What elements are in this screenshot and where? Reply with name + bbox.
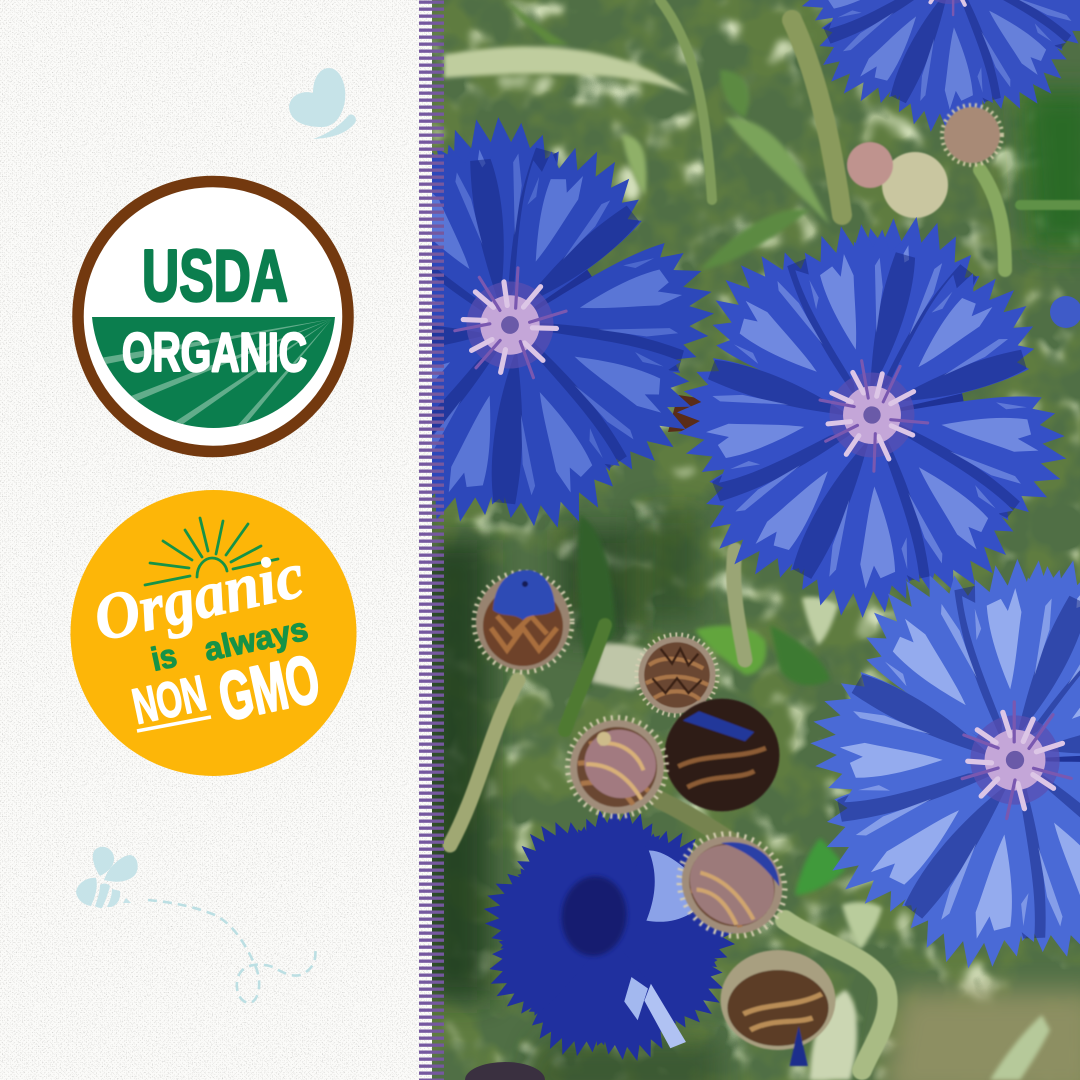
flower: dark lower: [484, 810, 735, 1061]
bud: small round: [638, 636, 716, 714]
bud: dark: [664, 699, 780, 811]
bud: purple-brown: [676, 830, 788, 940]
flower: center: [677, 217, 1066, 618]
flower heads: top small buds: [847, 105, 1002, 218]
badge: Organic is always Non GMO: Organic: [87, 538, 310, 656]
badge: USDA Organic seal: [78, 182, 348, 452]
badge: Organic is always Non GMO: is: [148, 636, 180, 678]
background: fabric panel: [0, 0, 432, 1080]
icon: sun rays: [145, 518, 278, 585]
bud: bottom edge: [465, 1062, 545, 1080]
photo background foliage: [420, 0, 1080, 1080]
leaves: [444, 0, 1050, 1080]
bud: blue tipped: [475, 570, 571, 671]
badge: Organic is always Non GMO: always: [201, 610, 311, 668]
bud: right edge: [1050, 296, 1080, 328]
bud: lower brown: [720, 950, 836, 1066]
badge: Organic is always Non GMO: [70, 490, 356, 776]
bud: pink: [564, 714, 670, 820]
badge: Organic is always Non GMO: NON: [128, 665, 211, 735]
photo: cornflowers: [432, 0, 1080, 1080]
flower: lower right: [810, 559, 1080, 968]
badge: USDA Organic seal: USDA: [142, 236, 288, 317]
badge: USDA Organic seal: ORGANIC: [122, 321, 307, 383]
badge: Organic is always Non GMO: GMO: [212, 641, 326, 736]
icon: bee with dashed flight path: [76, 847, 315, 1003]
calyx behind center flower: [668, 395, 701, 432]
decorative stripe band: [419, 0, 444, 1080]
icon: butterfly: [289, 68, 356, 139]
flower: upper left: [432, 117, 714, 528]
flower: top right: [802, 0, 1080, 132]
stems: [450, 0, 1080, 1070]
